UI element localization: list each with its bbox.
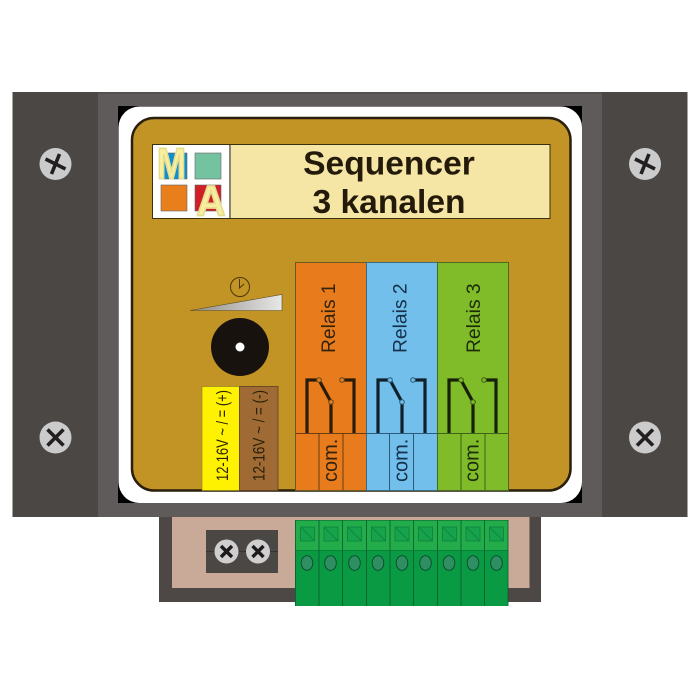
rear connector housing bbox=[159, 515, 541, 602]
relay 3 label: Relais 3 bbox=[464, 283, 485, 353]
relay 1 label: Relais 1 bbox=[319, 283, 340, 353]
panel: relay 2 bbox=[366, 262, 438, 490]
power label: positive bbox=[202, 386, 240, 490]
screw: top right bbox=[629, 148, 661, 180]
icon: delay wedge bbox=[190, 294, 282, 310]
relay 2 contact diagram bbox=[378, 378, 425, 433]
green relay connector bbox=[295, 520, 508, 606]
relay 3 terminal row bbox=[438, 434, 508, 490]
enclosure body bbox=[98, 92, 602, 517]
panel: relay 3 bbox=[438, 262, 508, 490]
relay 2 label: Relais 2 bbox=[390, 283, 412, 353]
logo letter M: M bbox=[157, 140, 186, 188]
power screw 2 bbox=[246, 540, 270, 564]
panel: relay 1 bbox=[296, 262, 366, 490]
power label: positive: 12-16V ~ / = (+) bbox=[213, 390, 232, 481]
screw: top left bbox=[40, 148, 72, 180]
front panel recess bbox=[118, 106, 582, 503]
left mounting flange bbox=[12, 92, 98, 517]
relay 2 terminal row bbox=[366, 434, 438, 490]
relay 3 terminal row: com. bbox=[462, 439, 484, 482]
connector clamp squares bbox=[300, 527, 504, 541]
title banner bbox=[229, 144, 550, 221]
icon: clock bbox=[230, 278, 250, 296]
relay 1 contact diagram bbox=[307, 378, 354, 433]
MA logo bbox=[152, 140, 230, 226]
power label: negative: 12-16V ~ / = (-) bbox=[250, 390, 268, 481]
screw: bottom left bbox=[40, 422, 72, 454]
title line 2: 3 kanalen bbox=[312, 184, 466, 221]
power label: negative bbox=[240, 386, 278, 490]
power terminal block bbox=[206, 530, 278, 573]
gold front panel bbox=[132, 118, 570, 490]
right mounting flange bbox=[602, 92, 688, 517]
title line 1: Sequencer bbox=[303, 146, 475, 182]
relay 1 terminal row: com. bbox=[320, 439, 342, 482]
relay 2 terminal row: com. bbox=[390, 439, 412, 482]
relay 3 contact diagram bbox=[449, 378, 496, 433]
potentiometer knob bbox=[211, 318, 269, 376]
logo letter A: A bbox=[196, 178, 226, 226]
screw: bottom right bbox=[629, 422, 661, 454]
relay 1 terminal row bbox=[296, 434, 366, 490]
power screw 1 bbox=[214, 540, 238, 564]
connector screw holes bbox=[301, 556, 502, 570]
